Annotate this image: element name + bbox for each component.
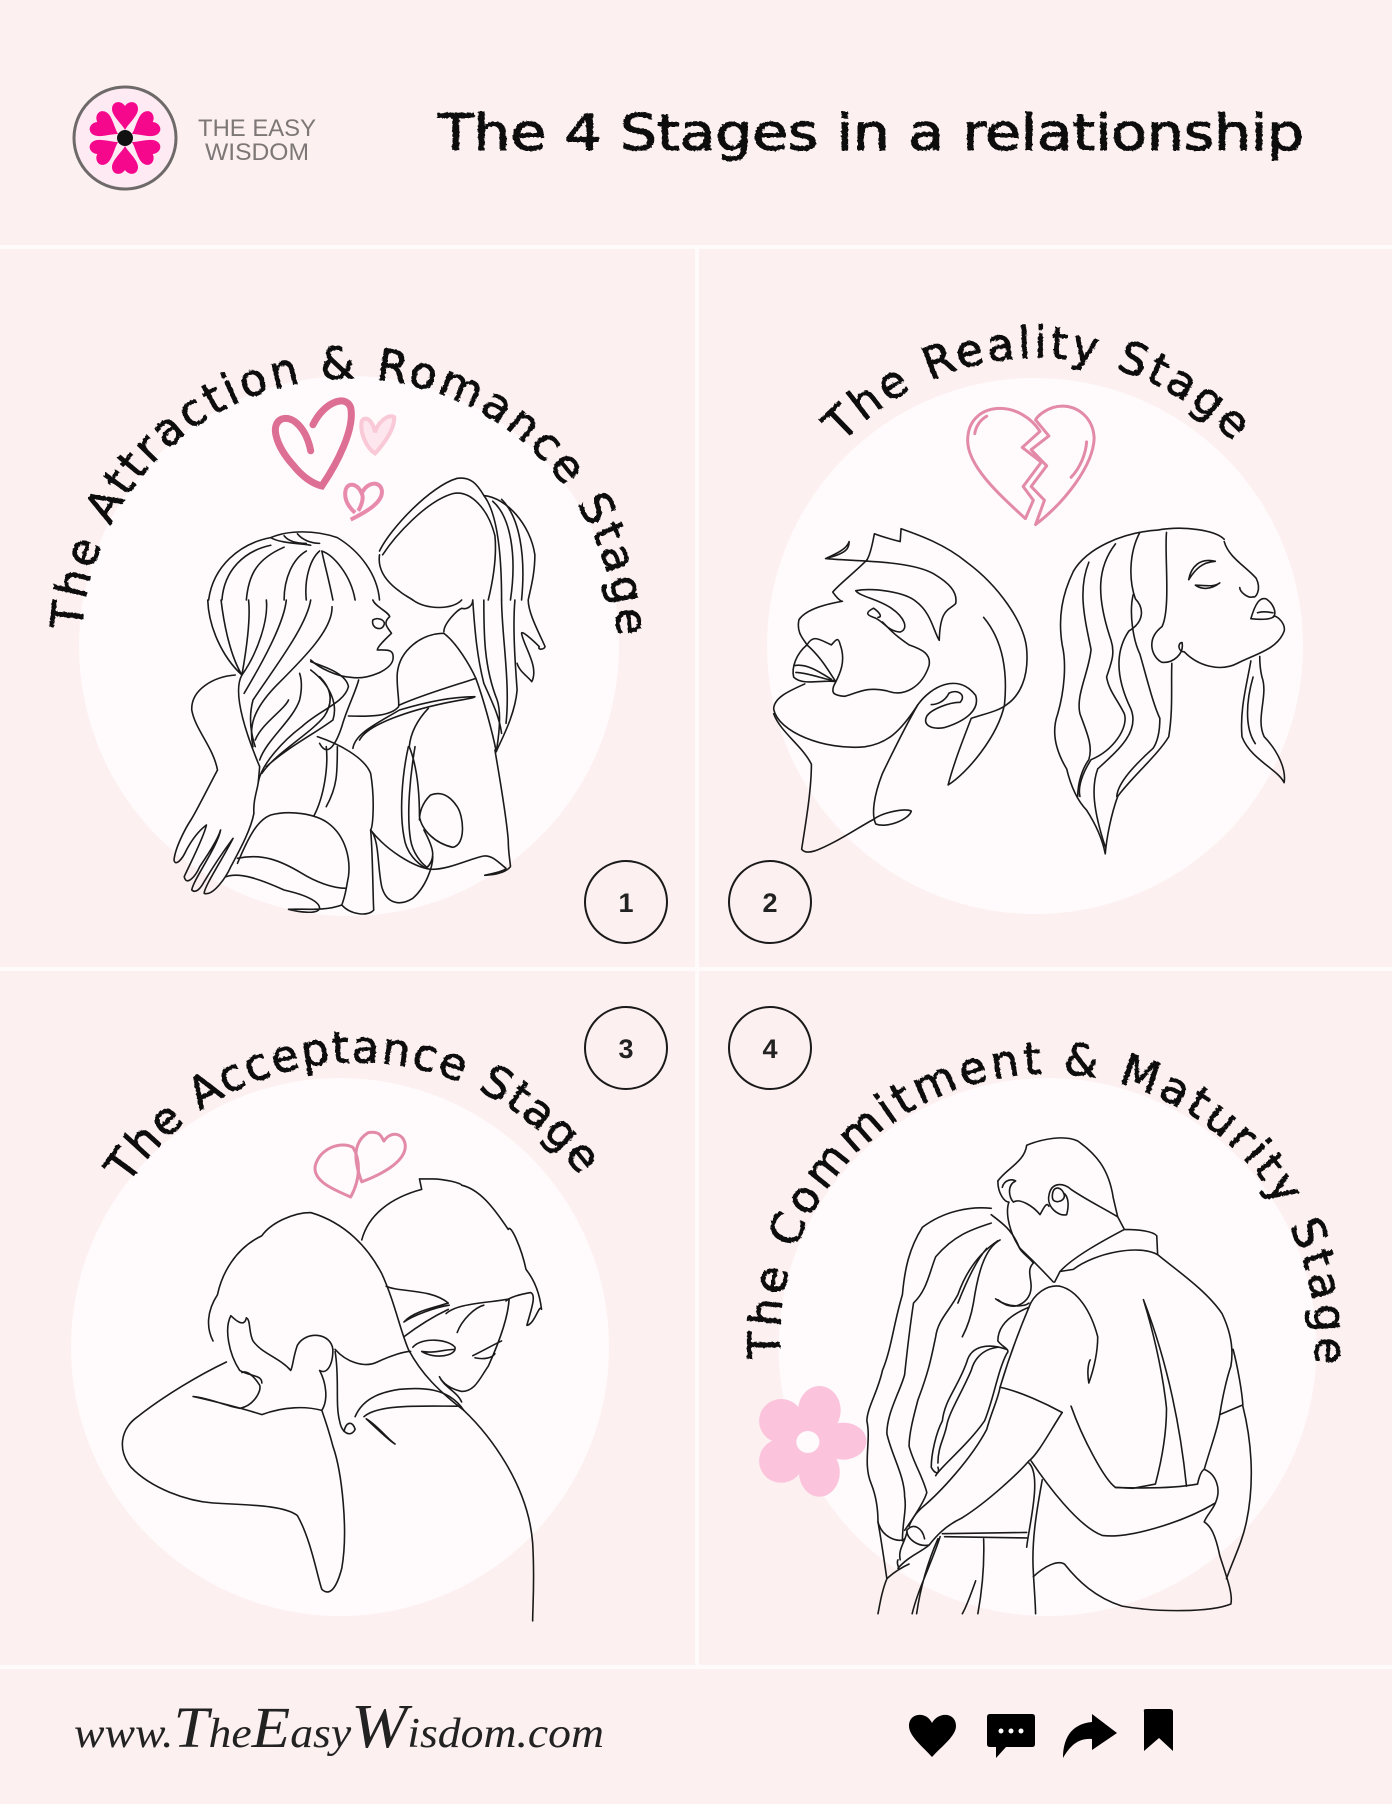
- icon: pink flower: [759, 1386, 866, 1497]
- illustration: embracing couple, lower part: [174, 600, 545, 914]
- heading: stage 3: The Acceptance Stage: [101, 1031, 594, 1176]
- logo: The Easy Wisdom: THE EASY: [198, 115, 316, 142]
- circle: stage 2 background: [767, 378, 1303, 914]
- circle: stage 4 background: [778, 1078, 1316, 1616]
- logo: The Easy Wisdom: WISDOM: [205, 139, 309, 166]
- logo: The Easy Wisdom: [74, 87, 316, 189]
- illustration: couple embracing from behind: [867, 1138, 1251, 1614]
- badge: 2: [729, 861, 811, 943]
- title: The 4 Stages in a relationship: [437, 104, 1304, 162]
- badge: 1: 1: [618, 888, 634, 918]
- illustration: embracing couple, upper part: [209, 478, 535, 600]
- illustration: man and woman facing apart: [774, 528, 1284, 854]
- icon: hearts: [275, 401, 394, 520]
- panel: stage 4 commitment and maturity: [728, 1006, 1342, 1616]
- badge: 3: 3: [618, 1034, 634, 1064]
- panel: stage 1 attraction and romance: [48, 345, 668, 944]
- icon: broken heart: [968, 406, 1094, 525]
- badge: 3: [585, 1007, 667, 1089]
- circle: stage 1 background: [79, 376, 619, 916]
- badge: 4: 4: [762, 1034, 778, 1064]
- heading: stage 4: The Commitment & Maturity Stage: [746, 1042, 1342, 1363]
- footer: website address: www.TheEasyWisdom.com: [74, 1693, 604, 1761]
- circle: stage 3 background: [71, 1078, 609, 1616]
- panel: stage 2 reality: [728, 323, 1303, 944]
- icon: heart: [909, 1715, 956, 1757]
- heading: stage 1: The Attraction & Romance Stage: [48, 345, 642, 634]
- heading: stage 2: The Reality Stage: [818, 323, 1246, 440]
- badge: 4: [729, 1007, 811, 1089]
- icon: share arrow: [1063, 1714, 1117, 1758]
- icon: two hearts: [315, 1132, 405, 1197]
- icon: comment: [987, 1714, 1035, 1758]
- badge: 2: 2: [762, 888, 778, 918]
- panel: stage 3 acceptance: [71, 1006, 668, 1622]
- icon: bookmark: [1144, 1709, 1173, 1751]
- badge: 1: [585, 861, 667, 943]
- illustration: hugging couple: [122, 1179, 542, 1621]
